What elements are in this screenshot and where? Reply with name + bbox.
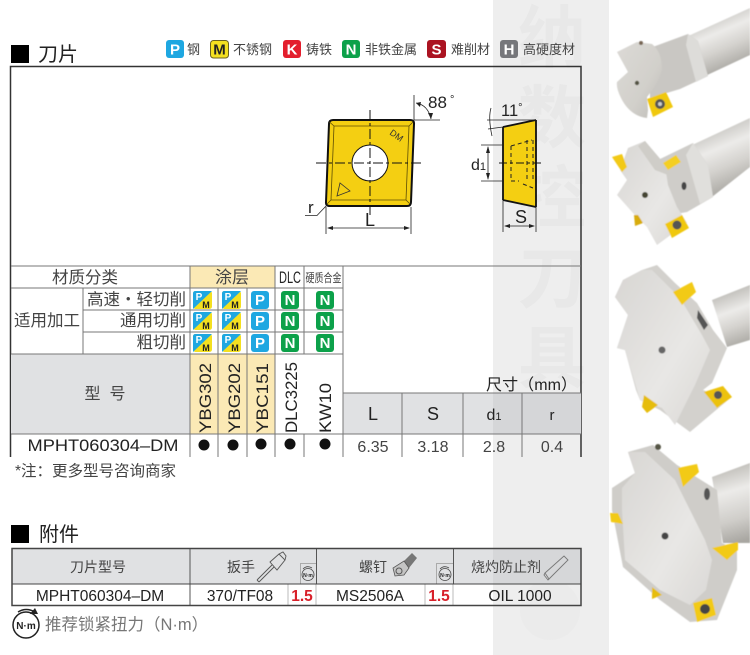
legend: material classes: 钢 [187, 42, 200, 57]
data row: MPHT060304–DM [28, 436, 178, 455]
material icons row 1: M [202, 300, 210, 310]
photo: four-insert disc cutter [615, 265, 750, 432]
legend: material classes: N [346, 42, 356, 58]
heading: inserts: 刀片 [38, 43, 78, 66]
material icons row 2: N [320, 313, 330, 330]
legend: material classes: 非铁金属 [365, 42, 417, 57]
legend: material classes [166, 40, 575, 58]
grade names: DLC3225 [282, 362, 301, 433]
grade names: YBC151 [253, 363, 272, 433]
material icons row 3: N [285, 335, 295, 352]
table: accessories [12, 548, 581, 606]
application labels: 高速・轻切削 [87, 290, 186, 309]
photo: two-flute cutter [617, 8, 750, 118]
diagram: insert side view: S [515, 207, 527, 227]
material icons row 2: P [255, 313, 265, 330]
grey background band: 刀 [518, 223, 586, 322]
icon: paste tube [544, 556, 568, 580]
legend: material classes: 高硬度材 [523, 42, 575, 57]
grey background band: 具 [518, 303, 586, 402]
table: accessories: 1.5 [428, 588, 450, 605]
material icons row 2: P [225, 313, 232, 324]
dimension headers: S [427, 404, 439, 424]
note: *注：更多型号咨询商家 [15, 462, 176, 480]
dimension headers: d1 [486, 407, 502, 424]
diagram: insert side view [471, 102, 542, 232]
material icons row 3: P [196, 335, 203, 346]
table: accessories: 扳手 [227, 559, 255, 575]
table header row: DLC [279, 268, 301, 287]
torque legend: 推荐锁紧扭力（N·m） [45, 615, 208, 634]
torque legend: N·m [16, 621, 36, 632]
dimension headers: L [368, 404, 378, 424]
grey background band: 数 [518, 63, 586, 162]
legend: material classes: 铸铁 [306, 42, 332, 57]
material icons row 2: M [202, 321, 210, 331]
grey background band: 控 [518, 143, 586, 242]
material icons row 1: N [320, 292, 330, 309]
diagram: insert top view: ° [447, 94, 454, 106]
material icons row 3 [193, 334, 334, 353]
data row [28, 436, 563, 456]
material icons row 2: N [285, 313, 295, 330]
material icons row 1: P [255, 292, 265, 309]
table: accessories: 烧灼防止剂 [471, 559, 541, 575]
data row: 0.4 [541, 439, 563, 456]
legend: material classes: S [431, 42, 442, 58]
diagram: insert side view: d1 [471, 157, 486, 174]
table: accessories: 螺钉 [359, 559, 387, 575]
icon: wrench [257, 552, 286, 582]
table header row [52, 268, 342, 287]
legend: material classes: 难削材 [451, 42, 490, 57]
photo: four-flute cutter [612, 118, 750, 245]
table: accessories: MPHT060304–DM [36, 588, 164, 605]
dimension headers: r [550, 407, 554, 424]
application labels: 适用加工 [14, 311, 80, 330]
diagram: insert top view: DM [388, 127, 405, 144]
heading: accessories: 附件 [39, 523, 79, 546]
legend: material classes: P [170, 42, 180, 58]
grade names [196, 362, 335, 433]
material icons row 3: N [320, 335, 330, 352]
icon: torque 2: N·m [440, 573, 450, 579]
material icons row 3: M [202, 343, 210, 353]
diagram: insert side view: ° [518, 102, 523, 114]
legend: material classes: M [213, 42, 226, 58]
icon: torque 2 [439, 567, 451, 580]
material icons row 3: P [255, 335, 265, 352]
material icons row 3: P [225, 335, 232, 346]
table cell fills [11, 266, 581, 434]
icon: screw [393, 553, 417, 576]
diagram: insert top view: L [365, 210, 375, 230]
diagram: insert top view [305, 93, 454, 234]
material icons row 3: M [231, 343, 239, 353]
application labels: 粗切削 [136, 333, 186, 352]
material icons row 2: M [231, 321, 239, 331]
table header row: 涂层 [215, 268, 249, 287]
heading: inserts [11, 43, 78, 66]
icon: torque 1 [302, 567, 314, 580]
icon: torque 1: N·m [303, 573, 313, 579]
table: accessories: MS2506A [336, 588, 405, 605]
diagram: insert side view: 11 [501, 102, 518, 120]
table header row: 材质分类 [52, 268, 118, 287]
torque legend [13, 608, 208, 638]
photo: six-insert disc cutter [610, 444, 750, 622]
material icons row 1 [193, 291, 334, 310]
table header row: 硬质合金 [306, 270, 342, 285]
table: accessories: 370/TF08 [207, 588, 273, 605]
data row: 6.35 [357, 439, 389, 456]
dimensions heading: 尺寸（mm） [486, 376, 577, 394]
table: grade and application matrix [11, 266, 581, 457]
material icons row 1: M [231, 300, 239, 310]
model label: 型 号 [85, 385, 125, 403]
grade names: YBG202 [225, 363, 244, 433]
table: accessories: 1.5 [291, 588, 313, 605]
grade names: KW10 [316, 383, 335, 433]
material icons row 1: P [196, 292, 203, 303]
data row: 3.18 [417, 439, 449, 456]
panel: insert specifications frame [10, 66, 581, 457]
diagram: insert top view: r [308, 198, 314, 217]
table: accessories: OIL 1000 [488, 588, 552, 605]
material icons row 1: P [225, 292, 232, 303]
application labels [14, 290, 186, 352]
heading: accessories [11, 523, 79, 546]
table: accessories: 刀片型号 [70, 559, 126, 575]
application labels: 通用切削 [120, 311, 186, 330]
material icons row 2: P [196, 313, 203, 324]
dimension headers [368, 404, 554, 424]
material icons row 1: N [285, 292, 295, 309]
grade names: YBG302 [196, 363, 215, 433]
diagram: insert top view: 88 [428, 93, 447, 112]
legend: material classes: K [287, 42, 298, 58]
grey background band [493, 0, 609, 655]
data row: 2.8 [483, 439, 505, 456]
legend: material classes: H [504, 42, 514, 58]
legend: material classes: 不锈钢 [233, 42, 272, 57]
material icons row 2 [193, 312, 334, 331]
